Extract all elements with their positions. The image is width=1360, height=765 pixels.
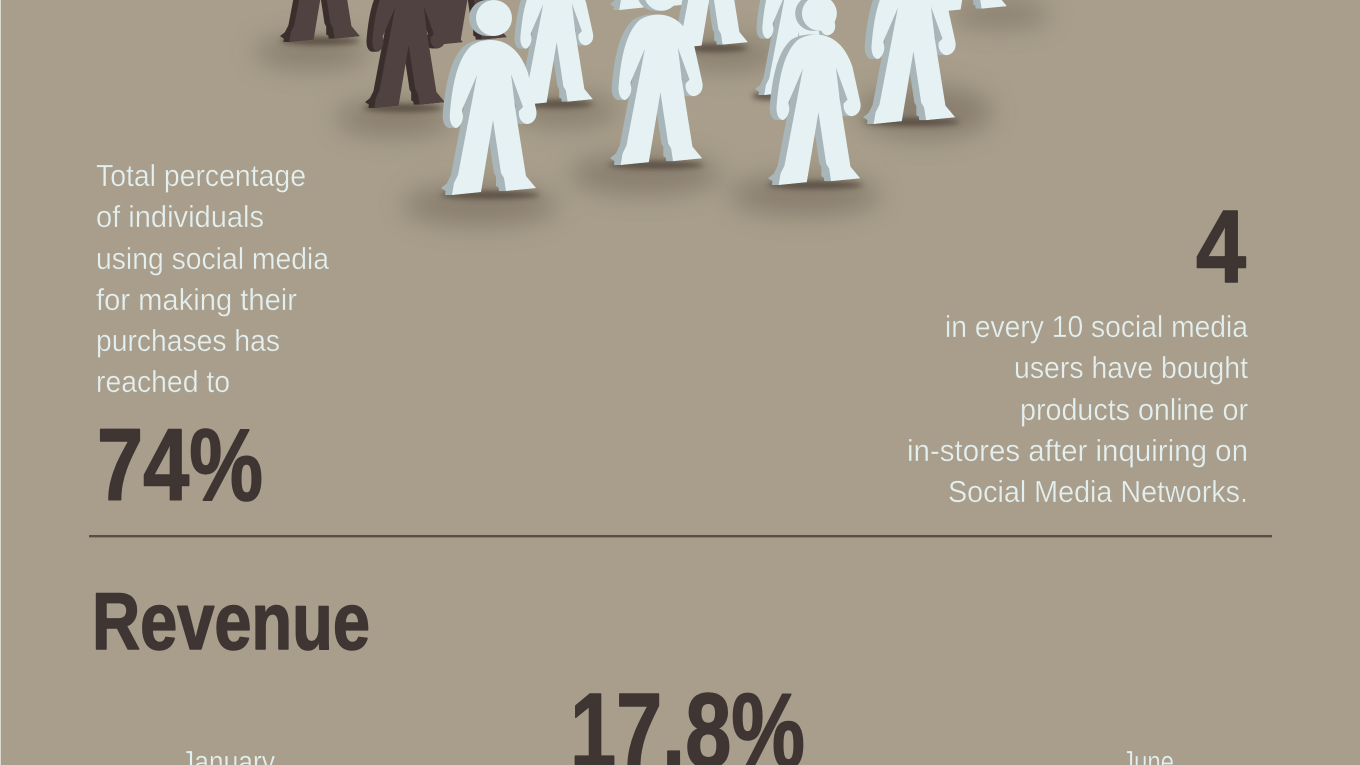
front row figures — [441, 0, 861, 195]
back row figures — [280, 0, 1007, 48]
text block: purchases via social media: using social media — [96, 241, 330, 276]
text block: purchases via social media: for making their — [96, 282, 297, 317]
text block: buyers after inquiring: users have bought — [1014, 350, 1248, 385]
text block: purchases via social media: purchases has — [96, 323, 280, 358]
text block: buyers after inquiring: Social Media Networks. — [948, 474, 1248, 509]
ground shadows — [254, 1, 1050, 225]
text block: purchases via social media: reached to — [96, 364, 230, 399]
text block: buyers after inquiring — [907, 309, 1249, 509]
statistic: 74%: 74% — [97, 408, 263, 522]
statistic: 4: 4 — [1196, 189, 1246, 304]
middle row figures — [365, 0, 956, 124]
text block: buyers after inquiring: in-stores after inquiring on — [907, 433, 1248, 468]
text block: buyers after inquiring: products online or — [1020, 392, 1248, 427]
text block: purchases via social media: of individuals — [96, 199, 264, 234]
text block: buyers after inquiring: in every 10 social media — [945, 309, 1249, 344]
text block: purchases via social media: Total percentage — [96, 158, 306, 193]
crowd illustration — [254, 0, 1050, 225]
text block: purchases via social media — [96, 158, 330, 399]
heading: Revenue: Revenue — [92, 577, 370, 667]
